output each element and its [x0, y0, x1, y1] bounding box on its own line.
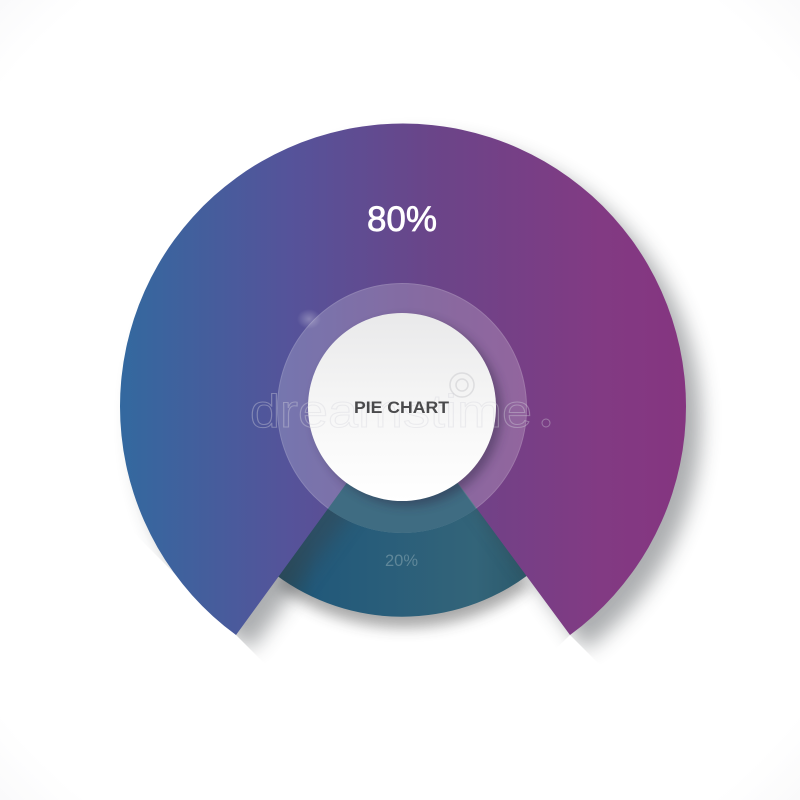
watermark: dreamstime	[250, 385, 532, 437]
shadow: small sector	[278, 418, 530, 628]
translucent glass ring	[277, 283, 527, 533]
center disc	[308, 313, 496, 501]
pie slice: 20% sector	[276, 407, 528, 617]
pie slice: 80% sector	[120, 124, 686, 635]
watermark	[250, 373, 550, 437]
label: 80%: 80%	[367, 200, 437, 239]
title: PIE CHART: PIE CHART	[354, 399, 449, 417]
shadow: center disc	[314, 318, 502, 506]
glint on ring	[297, 309, 321, 329]
shadow: large sector	[135, 139, 701, 650]
label: 20%: 20%	[385, 552, 418, 570]
